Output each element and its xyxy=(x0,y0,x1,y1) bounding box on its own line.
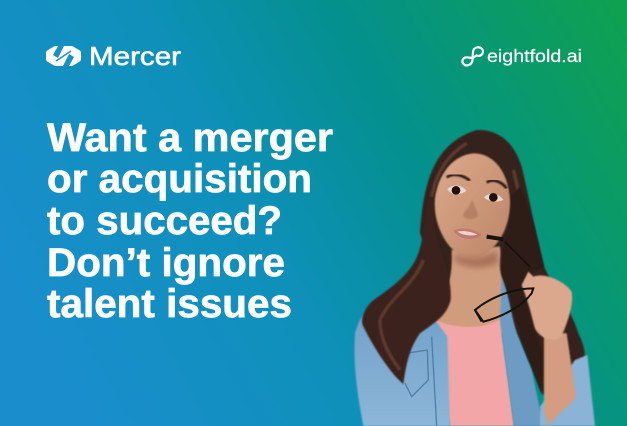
icon: Mercer mark xyxy=(46,46,81,66)
photo: woman holding glasses xyxy=(354,130,595,426)
forearm and wrist xyxy=(544,333,576,426)
neck and chest xyxy=(425,247,510,333)
headline: or acquisition xyxy=(47,157,312,201)
denim shirt right xyxy=(500,275,543,426)
Mercer logo xyxy=(46,41,181,71)
lips xyxy=(453,229,482,239)
pink t-shirt xyxy=(435,319,514,426)
denim shirt left xyxy=(354,303,450,426)
icon: eightfold infinity mark xyxy=(462,47,483,65)
eyeglasses xyxy=(475,237,533,322)
headline: Want a merger xyxy=(47,116,333,160)
front left hair xyxy=(362,173,451,384)
nose xyxy=(463,200,478,219)
headline: talent issues xyxy=(47,282,292,326)
back hair xyxy=(420,130,585,395)
front right hair xyxy=(500,187,544,395)
denim pocket and placket xyxy=(405,337,437,426)
headline: Don’t ignore xyxy=(47,241,285,285)
eightfold.ai wordmark: eightfold.ai xyxy=(487,46,582,66)
denim sleeve right xyxy=(540,355,595,426)
face xyxy=(435,153,510,258)
headline: to succeed? xyxy=(47,199,282,243)
hand xyxy=(522,272,572,340)
eightfold.ai logo xyxy=(462,46,582,66)
left eye and brow xyxy=(447,175,470,195)
headline xyxy=(47,116,333,326)
neck shadow xyxy=(455,250,498,268)
Mercer wordmark: Mercer xyxy=(89,41,181,71)
right eye and brow xyxy=(484,181,507,202)
hair highlights xyxy=(380,143,532,370)
